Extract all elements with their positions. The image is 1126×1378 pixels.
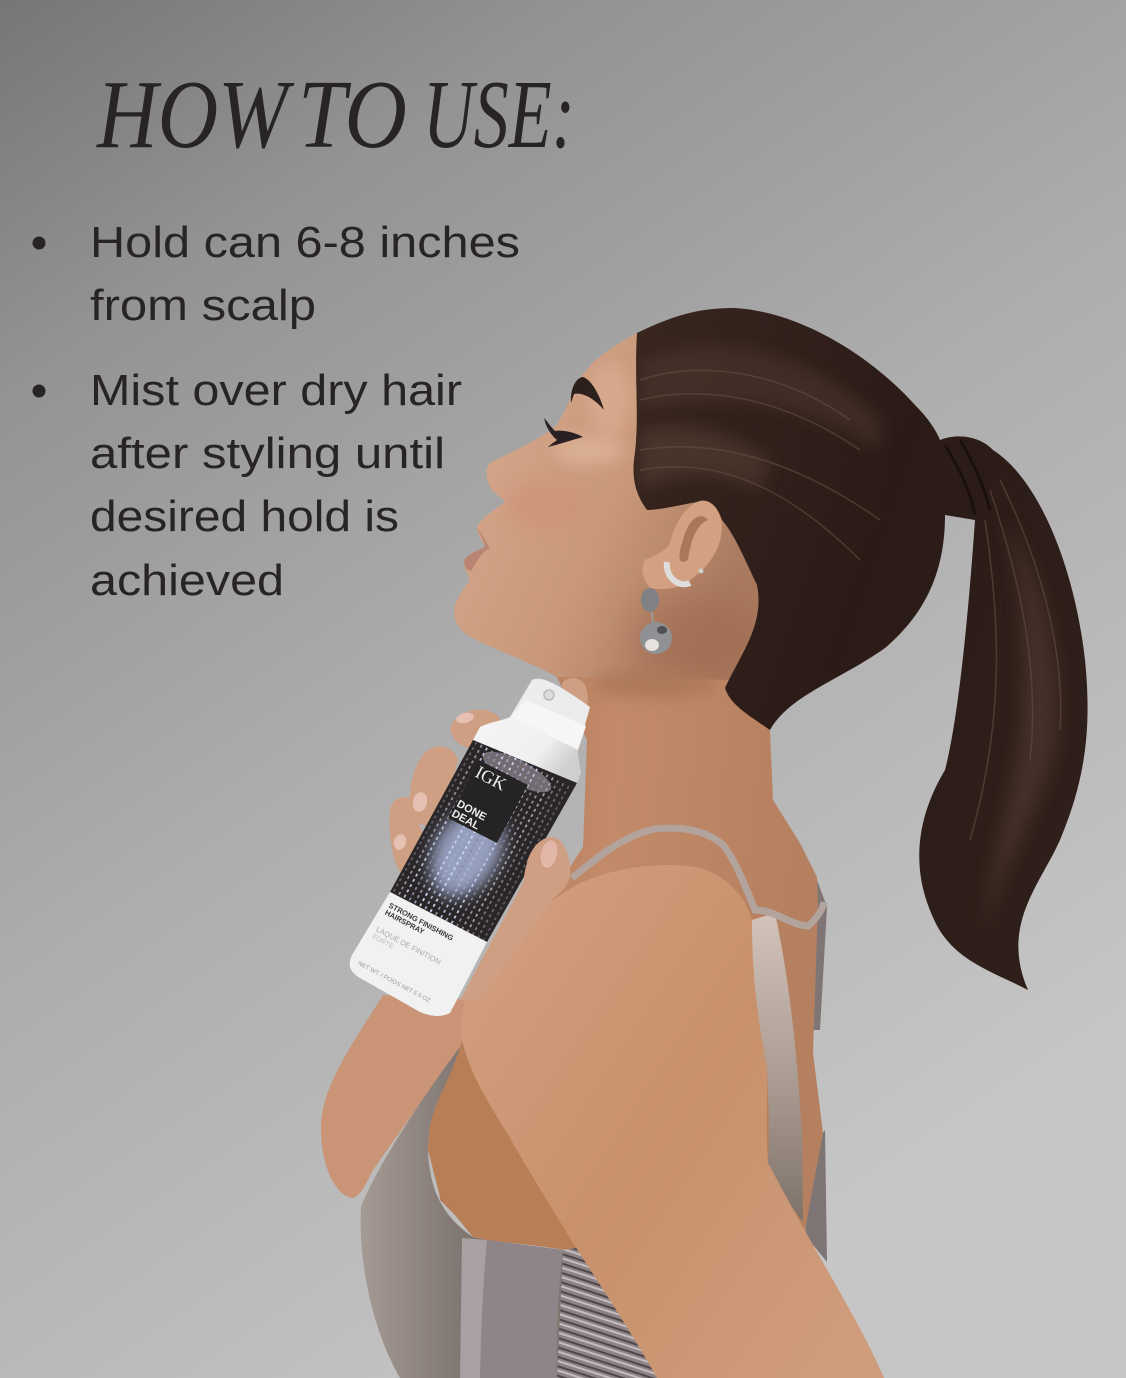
bullet 2: mist over dry hair: achieved <box>90 556 284 605</box>
bullet 2: mist over dry hair: Mist over dry hair <box>90 366 462 415</box>
dress front <box>361 1047 657 1378</box>
back fabric of dress <box>800 880 827 1262</box>
hand and spray can <box>350 678 590 1016</box>
forearm <box>321 995 475 1198</box>
product name: DONE <box>455 798 488 824</box>
title: USE: <box>423 61 575 169</box>
dress back panel <box>752 913 803 1222</box>
product name: DEAL <box>449 808 482 833</box>
illustration: woman in profile holding a spray can <box>321 308 1088 1378</box>
bullet 2: mist over dry hair: desired hold is <box>90 492 399 541</box>
hair shading <box>640 346 1061 930</box>
ear <box>642 501 722 589</box>
fingers behind the can <box>389 678 588 1000</box>
can base <box>350 892 487 1016</box>
dress centre panel <box>480 1240 563 1378</box>
thumb <box>524 837 570 903</box>
jaw to neck blend <box>593 671 717 697</box>
shoulder and upper arm <box>461 865 884 1378</box>
dress textured right section <box>557 1248 657 1378</box>
dress strap <box>572 828 824 926</box>
earrings <box>640 562 704 654</box>
bullet 2: mist over dry hair <box>32 366 462 605</box>
dress highlight streak <box>460 1238 487 1378</box>
ear fold <box>679 516 708 562</box>
title: TO <box>298 61 407 169</box>
can cap <box>510 679 590 750</box>
brand name: IGK <box>472 762 510 795</box>
can shoulder <box>473 717 581 783</box>
product name <box>449 798 488 833</box>
title: HOW <box>95 61 295 169</box>
can base text: STRONG FINISHING <box>387 901 455 943</box>
thumbnail <box>538 839 560 869</box>
bullet list: instructions <box>32 218 520 605</box>
bullet 1: hold distance <box>32 218 520 330</box>
face <box>454 333 770 680</box>
bullet 2: mist over dry hair: after styling until <box>90 429 445 478</box>
can base text <box>357 901 463 1004</box>
can base text: NET WT. / POIDS NET 5.5 OZ <box>357 961 431 1004</box>
bullet 1: hold distance: from scalp <box>90 281 316 330</box>
lips <box>464 528 490 571</box>
face shading <box>519 367 752 670</box>
can base text: HAIRSPRAY <box>383 908 426 936</box>
neck and back <box>430 600 823 1250</box>
hair <box>634 308 1088 990</box>
can base text: FORTE <box>371 933 395 951</box>
label block <box>448 760 528 843</box>
chest shadow <box>428 1047 600 1252</box>
fingernails <box>392 711 475 851</box>
bullet 1: hold distance: Hold can 6-8 inches <box>90 218 520 267</box>
can base text: LAQUE DE FINITION <box>374 925 442 966</box>
eye and brow <box>544 377 604 447</box>
title <box>95 61 575 169</box>
can label <box>387 737 577 952</box>
